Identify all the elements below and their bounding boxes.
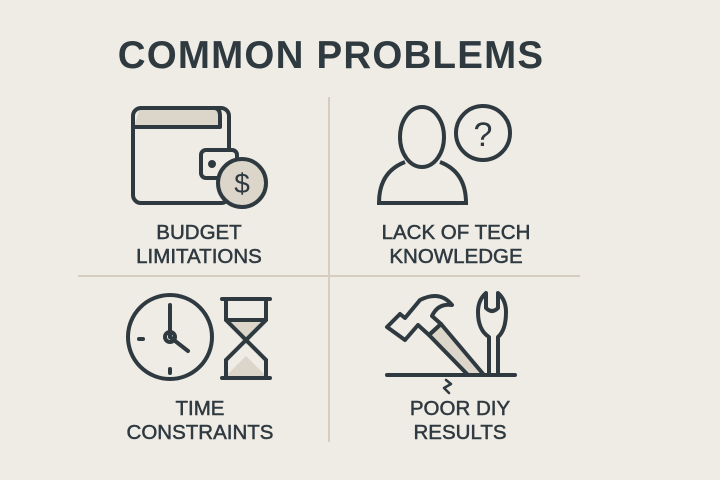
label: budget: BUDGET [156, 221, 242, 244]
icon: person with question: ? [474, 116, 492, 154]
label: diy [410, 397, 510, 444]
icon: clock and hourglass [128, 295, 270, 379]
label: diy: RESULTS [413, 421, 507, 444]
title: COMMON PROBLEMS [118, 34, 544, 77]
label: budget [136, 221, 262, 268]
icon: wallet with coin [133, 108, 266, 207]
label: diy: POOR DIY [410, 397, 510, 420]
icon: hammer and wrench [387, 293, 515, 393]
label: time: TIME [176, 397, 224, 420]
label: tech: LACK OF TECH [382, 221, 530, 244]
label: tech: KNOWLEDGE [389, 245, 523, 268]
label: tech [382, 221, 530, 268]
label: time [127, 397, 273, 444]
icon: wallet with coin: $ [234, 168, 250, 199]
label: time: CONSTRAINTS [127, 421, 273, 444]
label: budget: LIMITATIONS [136, 245, 262, 268]
icon: person with question [379, 106, 510, 203]
